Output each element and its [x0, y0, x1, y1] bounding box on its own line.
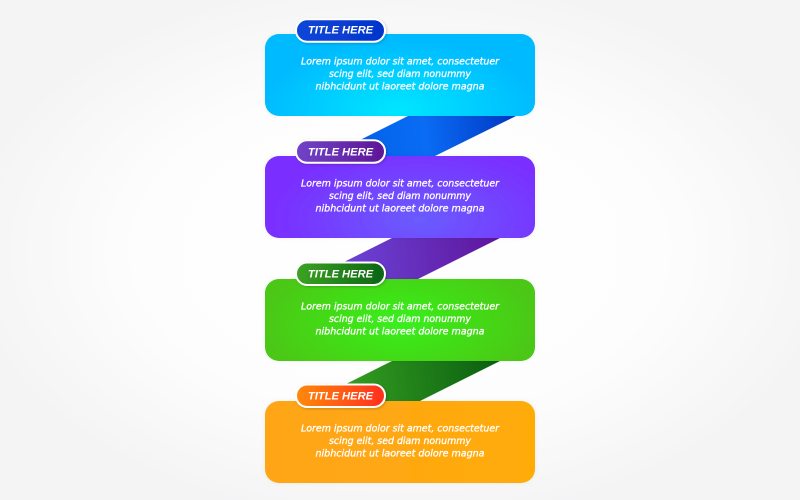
text block: purple: [301, 179, 500, 215]
title pill: purple: TITLE HERE: [308, 146, 374, 158]
text block: purple: scing elit, sed diam nonummy: [329, 191, 472, 202]
panel: blue step: [265, 19, 535, 116]
ribbon: blue connector: [328, 116, 516, 156]
card: green: [265, 279, 535, 361]
card: orange: [265, 401, 535, 483]
card: blue: [265, 34, 535, 116]
text block: purple: nibhcidunt ut laoreet dolore magna: [316, 204, 484, 215]
title pill: purple: [296, 140, 385, 163]
text block: blue: Lorem ipsum dolor sit amet, consectetuer: [301, 57, 500, 68]
title pill: blue: TITLE HERE: [308, 24, 374, 36]
panel: orange step: [265, 384, 535, 483]
title pill: blue: [296, 19, 385, 42]
text block: blue: scing elit, sed diam nonummy: [329, 69, 472, 80]
text block: green: scing elit, sed diam nonummy: [329, 314, 472, 325]
text block: green: [301, 302, 500, 338]
panel: green step: [265, 262, 535, 361]
text block: green: Lorem ipsum dolor sit amet, consectetuer: [301, 302, 500, 313]
title pill: orange: [296, 384, 385, 407]
card: purple: [265, 156, 535, 238]
panel: purple step: [265, 140, 535, 238]
text block: green: nibhcidunt ut laoreet dolore magna: [316, 327, 484, 338]
title pill: orange: TITLE HERE: [308, 390, 374, 402]
text block: orange: scing elit, sed diam nonummy: [329, 436, 472, 447]
title pill: green: TITLE HERE: [308, 268, 374, 280]
ribbon: green connector: [312, 361, 500, 401]
ribbon: purple connector: [310, 238, 500, 279]
text block: blue: nibhcidunt ut laoreet dolore magna: [316, 82, 484, 93]
title pill: green: [296, 262, 385, 285]
text block: orange: nibhcidunt ut laoreet dolore magna: [316, 449, 484, 460]
text block: orange: [301, 424, 500, 460]
text block: blue: [301, 57, 500, 93]
text block: orange: Lorem ipsum dolor sit amet, consectetuer: [301, 424, 500, 435]
text block: purple: Lorem ipsum dolor sit amet, consectetuer: [301, 179, 500, 190]
